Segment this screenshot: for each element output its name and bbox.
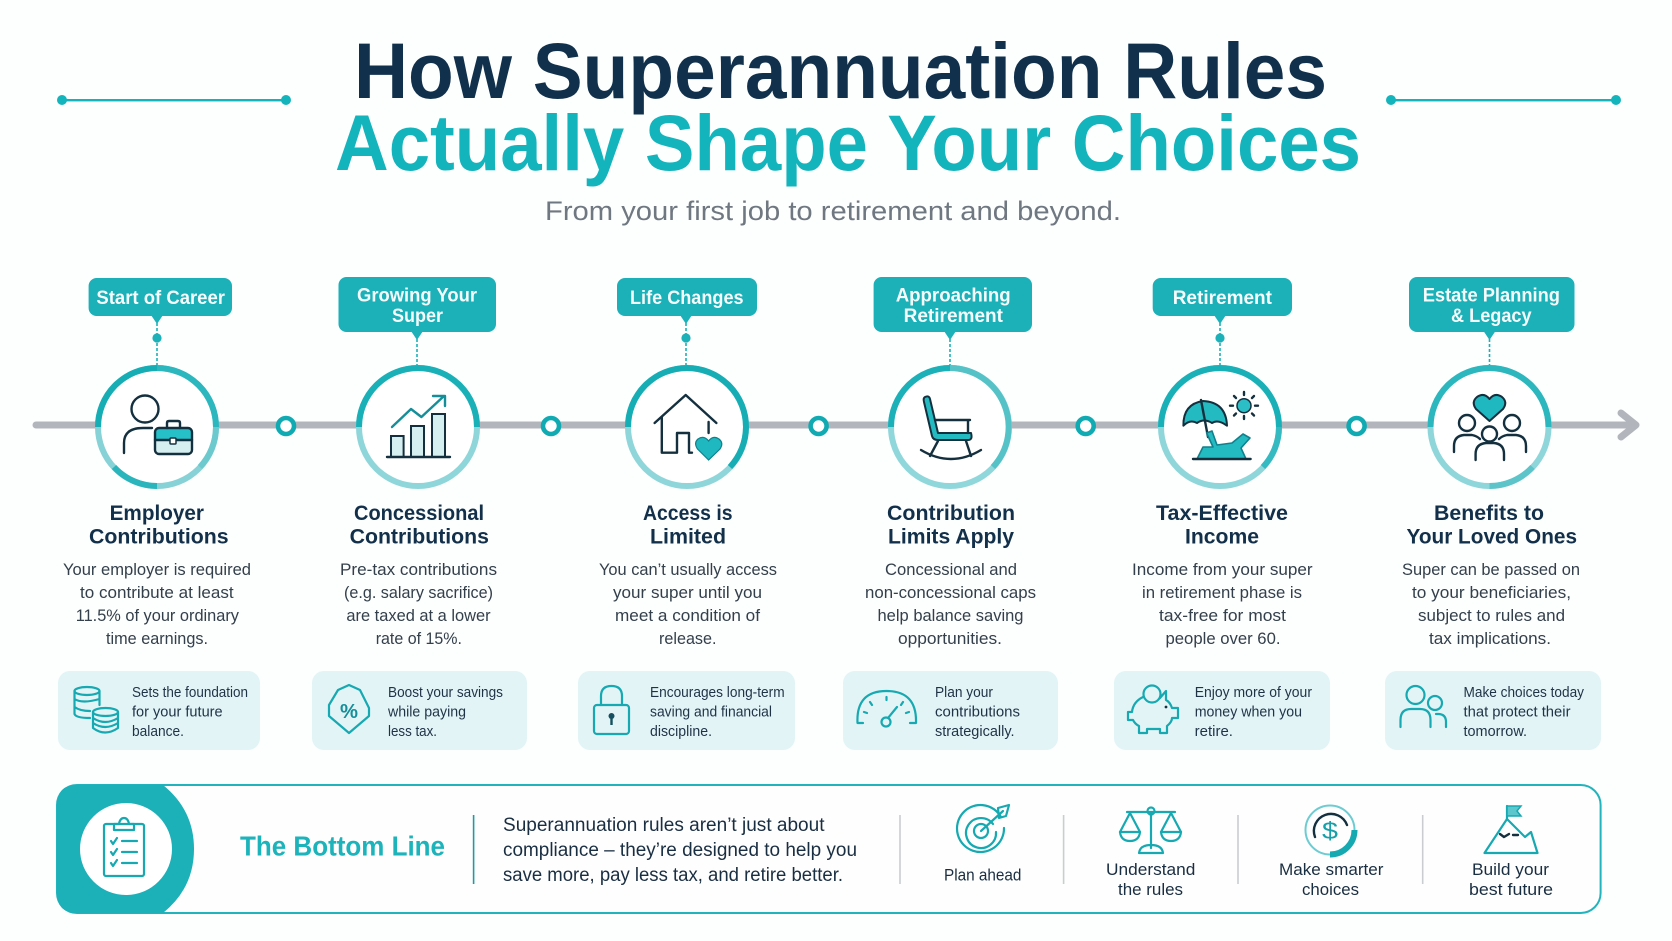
stage pill: Approaching Retirement xyxy=(874,277,1032,365)
column 2 text: rate of 15%. xyxy=(376,629,462,648)
icon: clipboard checklist xyxy=(104,818,144,876)
column 4 text xyxy=(865,502,1036,648)
card 2: savings: while paying xyxy=(387,705,466,721)
column 5 text: Income from your super xyxy=(1132,560,1313,579)
stage pill: Estate Planning and Legacy xyxy=(1409,277,1574,365)
takeaway: understand the rules xyxy=(1106,808,1195,899)
column 1 text: 11.5% of your ordinary xyxy=(76,606,239,625)
icon: two people xyxy=(1400,686,1446,727)
takeaway: make smarter choices: Make smarter xyxy=(1279,860,1384,879)
card 1: foundation: balance. xyxy=(132,724,184,740)
column 2 text: (e.g. salary sacrifice) xyxy=(344,583,493,602)
column 5 text: in retirement phase is xyxy=(1142,583,1302,602)
takeaway: build your best future xyxy=(1469,806,1553,899)
icon: person with briefcase xyxy=(124,396,192,454)
title: Actually Shape Your Choices xyxy=(335,98,1361,187)
card 1: foundation xyxy=(58,671,260,750)
card 6: tomorrow xyxy=(1385,671,1601,750)
icon: piggy bank xyxy=(1128,686,1178,733)
stage pill: Approaching Retirement: Approaching xyxy=(896,286,1011,306)
ring 1 xyxy=(98,368,216,486)
column 4 text: Concessional and xyxy=(885,560,1017,579)
column 1 text xyxy=(63,502,251,648)
card 1: foundation: Sets the foundation xyxy=(132,685,248,701)
column 5 text: Income xyxy=(1185,526,1259,548)
column 3 text: release. xyxy=(659,629,716,648)
stage pill: Start of Career: Start of Career xyxy=(96,288,226,309)
stage pill: Growing Your Super xyxy=(338,277,496,365)
column 6 text: to your beneficiaries, xyxy=(1412,583,1571,602)
takeaway: understand the rules: the rules xyxy=(1118,880,1183,899)
column 4 text: Contribution xyxy=(887,502,1015,525)
column 5 text: Tax-Effective xyxy=(1156,502,1288,525)
column 6 text: Super can be passed on xyxy=(1402,560,1580,579)
icon: coin stacks xyxy=(74,687,118,732)
card 2: savings: less tax. xyxy=(388,724,437,740)
column 3 text: your super until you xyxy=(613,583,762,602)
card 5: retire: money when you xyxy=(1195,705,1302,721)
card 4: contributions: Plan your xyxy=(935,685,993,701)
column 6 text: Benefits to xyxy=(1434,502,1544,525)
card 6: tomorrow: Make choices today xyxy=(1464,685,1585,701)
takeaway: make smarter choices xyxy=(1279,806,1384,899)
column 4 text: opportunities. xyxy=(898,629,1002,648)
stage pill: Estate Planning and Legacy: & Legacy xyxy=(1451,306,1532,327)
takeaway: plan ahead xyxy=(944,805,1021,885)
column 5 text: tax-free for most xyxy=(1159,606,1286,625)
takeaway: build your best future: best future xyxy=(1469,880,1553,899)
icon: beach umbrella, sun and lounger xyxy=(1183,392,1258,459)
icon: rocking chair xyxy=(921,396,981,459)
stage pill: Growing Your Super: Super xyxy=(392,306,444,327)
timeline nodes xyxy=(278,418,1365,434)
takeaway: plan ahead: Plan ahead xyxy=(944,866,1021,885)
icon: growth chart xyxy=(387,396,450,457)
icon: percent tag: % xyxy=(340,701,358,723)
ring 4 xyxy=(891,368,1009,486)
card 5: retire: Enjoy more of your xyxy=(1195,685,1312,701)
column 2 text xyxy=(340,502,497,648)
column 2 text: Concessional xyxy=(354,502,484,525)
column 1 text: time earnings. xyxy=(106,629,208,648)
bottom line text: compliance – they’re designed to help you xyxy=(503,840,857,861)
ring 6 xyxy=(1430,368,1548,486)
stage pill: Life Changes: Life Changes xyxy=(630,288,744,309)
column 3 text: meet a condition of xyxy=(615,606,760,625)
card 5: retire: retire. xyxy=(1195,724,1233,740)
takeaway: make smarter choices: $ xyxy=(1322,818,1338,845)
column 4 text: Limits Apply xyxy=(888,526,1014,548)
column 3 text: Access is xyxy=(643,502,732,525)
ring 2 xyxy=(359,368,477,486)
stage pill: Approaching Retirement: Retirement xyxy=(904,306,1004,327)
column 1 text: Contributions xyxy=(89,526,229,548)
icon: percent tag xyxy=(329,685,369,733)
column 6 text: tax implications. xyxy=(1429,629,1551,648)
column 5 text xyxy=(1132,502,1313,648)
column 6 text: Your Loved Ones xyxy=(1406,526,1577,548)
bottom line text: Superannuation rules aren’t just about xyxy=(503,815,825,836)
takeaway: build your best future: Build your xyxy=(1472,860,1549,879)
column 3 text xyxy=(599,502,777,648)
icon: family with heart xyxy=(1454,395,1526,460)
column 6 text: subject to rules and xyxy=(1418,606,1565,625)
timeline line with arrow xyxy=(36,413,1636,437)
column 1 text: Employer xyxy=(110,502,204,525)
icon: padlock xyxy=(594,686,629,734)
bottom line text: save more, pay less tax, and retire better. xyxy=(503,865,843,886)
card 4: contributions xyxy=(843,671,1058,750)
stage pill: Start of Career xyxy=(89,278,232,365)
stage pill: Life Changes xyxy=(617,278,757,365)
title: How Superannuation Rules xyxy=(354,26,1327,115)
column 2 text: Contributions xyxy=(350,526,489,548)
card 3: discipline: discipline. xyxy=(650,724,712,740)
card 4: contributions: contributions xyxy=(935,705,1020,721)
decorative line left xyxy=(57,95,291,105)
card 1: foundation: for your future xyxy=(132,705,223,721)
panel: the bottom line xyxy=(57,785,1601,913)
ring 5 xyxy=(1161,368,1279,486)
bottom line text xyxy=(503,815,857,886)
icon: gauge xyxy=(857,691,916,726)
title xyxy=(335,26,1361,187)
column 3 text: Limited xyxy=(650,526,726,548)
card 5: retire xyxy=(1114,671,1330,750)
takeaway: make smarter choices: choices xyxy=(1302,880,1359,899)
subtitle: From your first job to retirement and beyond. xyxy=(545,196,1121,226)
card 2: savings: Boost your savings xyxy=(388,685,503,701)
stage pill: Growing Your Super: Growing Your xyxy=(357,286,478,306)
icon: house with heart xyxy=(655,395,722,460)
stage pill: Retirement xyxy=(1153,278,1292,365)
card 4: contributions: strategically. xyxy=(935,724,1015,740)
stage pill: Estate Planning and Legacy: Estate Planning xyxy=(1423,286,1560,306)
card 6: tomorrow: tomorrow. xyxy=(1464,724,1527,740)
column 4 text: help balance saving xyxy=(878,606,1024,625)
card 3: discipline: saving and financial xyxy=(650,705,772,721)
column 6 text xyxy=(1402,502,1580,648)
column 5 text: people over 60. xyxy=(1166,629,1280,648)
column 2 text: Pre-tax contributions xyxy=(340,560,497,579)
decorative line right xyxy=(1386,95,1621,105)
card 6: tomorrow: that protect their xyxy=(1464,705,1571,721)
column 4 text: non-concessional caps xyxy=(865,583,1036,602)
card 3: discipline xyxy=(578,671,795,750)
card 3: discipline: Encourages long-term xyxy=(650,685,785,701)
column 2 text: are taxed at a lower xyxy=(346,606,491,625)
column 1 text: to contribute at least xyxy=(80,583,234,602)
ring 3 xyxy=(628,368,746,486)
column 3 text: You can’t usually access xyxy=(599,560,777,579)
column 1 text: Your employer is required xyxy=(63,560,251,579)
heading: the bottom line: The Bottom Line xyxy=(240,831,445,862)
card 2: savings xyxy=(312,671,527,750)
takeaway: understand the rules: Understand xyxy=(1106,860,1195,879)
stage pill: Retirement: Retirement xyxy=(1173,288,1273,309)
